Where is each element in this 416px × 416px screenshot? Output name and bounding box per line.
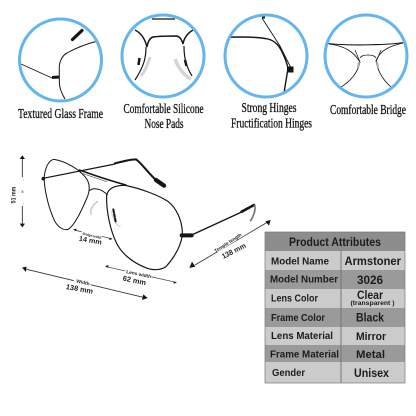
icon: aviator glasses <box>41 159 255 270</box>
panel: comfortable silicone nose pads feature <box>122 15 204 132</box>
row: model name <box>265 251 405 270</box>
panel: strong hinges feature <box>225 15 312 132</box>
caption: Comfortable Silicone Nose Pads <box>124 102 204 132</box>
row: lens color <box>265 288 405 308</box>
caption: Strong Hinges Fructification Hinges <box>231 101 312 132</box>
dimension: overall width 138 mm: 138 mm <box>65 282 94 296</box>
caption: Comfortable Silicone Nose Pads: Comfortable Silicone <box>124 102 204 117</box>
panel: textured glass frame feature <box>18 19 103 122</box>
row: model number: 3026 <box>357 273 383 287</box>
row: lens color: (transparent ) <box>350 301 395 307</box>
dimension: overall width 138 mm: Width <box>76 278 90 286</box>
dimension: height 51 mm <box>10 155 25 227</box>
dimension: height 51 mm: ← H → <box>21 178 25 205</box>
dimension: bridge width 14 mm: 14 mm <box>78 236 102 247</box>
table: product attributes <box>265 232 405 383</box>
near lens <box>107 185 182 270</box>
caption: Textured Glass Frame: Textured Glass Frame <box>18 107 103 122</box>
row: lens color: Lens Color <box>271 292 318 304</box>
row: model name: Model Name <box>271 256 329 268</box>
caption: Strong Hinges Fructification Hinges: Fructification Hinges <box>231 116 312 132</box>
row: frame color: Frame Color <box>271 312 325 324</box>
caption: Comfortable Silicone Nose Pads: Nose Pads <box>144 117 184 132</box>
icon: nose pads closeup <box>122 15 204 97</box>
row: frame material: Metal <box>356 349 385 361</box>
row: lens color: Clear <box>357 288 383 302</box>
dimension: lens width 62 mm <box>105 265 177 287</box>
dimension: bridge width 14 mm: Bridge width <box>82 232 102 240</box>
dimension: bridge width 14 mm <box>73 227 113 247</box>
row: gender: Gender <box>272 367 305 379</box>
row: frame material <box>265 345 405 362</box>
row: gender <box>265 362 405 383</box>
icon: frame corner closeup <box>20 19 102 101</box>
dimension: lens width 62 mm: Lens width <box>126 269 152 279</box>
panel: comfortable bridge feature <box>325 15 407 118</box>
far temple <box>43 164 115 178</box>
caption: Strong Hinges Fructification Hinges: Strong Hinges <box>242 101 296 116</box>
row: frame color: Black <box>356 310 384 324</box>
dimension: lens width 62 mm: 62 mm <box>122 273 147 287</box>
header: Product Attributes <box>265 232 405 251</box>
dimension: overall width 138 mm <box>22 267 148 300</box>
dimension: temple length 138 mm: 138 mm <box>220 241 248 261</box>
row: model number: Model Number <box>270 274 338 286</box>
nose pads <box>91 202 97 214</box>
header: Product Attributes: Product Attributes <box>289 237 381 249</box>
row: lens material <box>265 327 405 345</box>
dimension: height 51 mm: 51 mm <box>10 187 17 203</box>
dimension: temple length 138 mm: Temple length <box>213 232 243 254</box>
dimension: temple length 138 mm <box>189 220 271 268</box>
row: frame color <box>265 308 405 327</box>
icon: bridge closeup <box>325 15 407 97</box>
bridge bars <box>79 170 126 185</box>
illustration: aviator glasses with dimensions <box>10 155 271 300</box>
row: lens material: Mirror <box>356 331 387 343</box>
row: model name: Armstoner <box>344 254 401 268</box>
icon: hinge closeup <box>225 15 307 97</box>
row: frame material: Frame Material <box>270 348 339 360</box>
row: model number <box>265 270 405 289</box>
far lens <box>44 159 89 230</box>
row: lens material: Lens Material <box>271 330 333 342</box>
row: gender: Unisex <box>354 366 389 380</box>
near temple <box>182 229 192 241</box>
